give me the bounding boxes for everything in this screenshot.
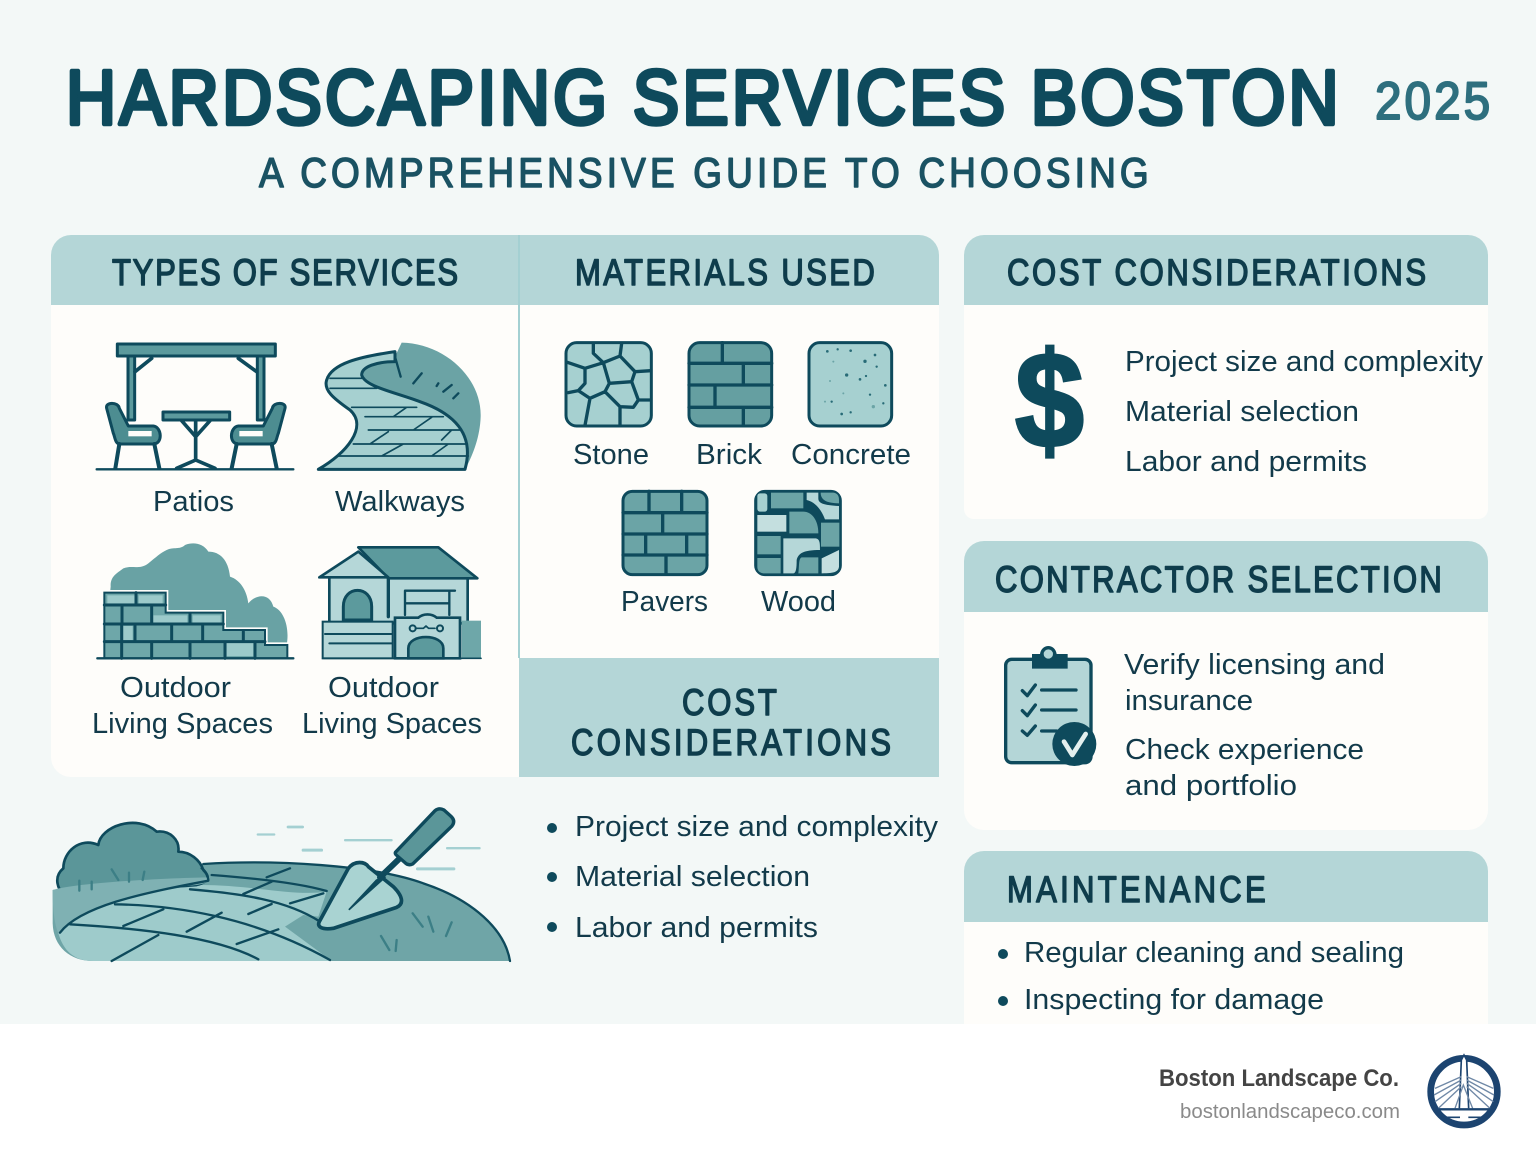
label: walkways: Walkways	[335, 486, 465, 518]
list: maintenance tasks: Inspecting for damage	[1024, 984, 1324, 1016]
label: brick: Brick	[696, 439, 763, 471]
text: experience: Check experience	[1125, 734, 1364, 766]
list: cost factors middle: Material selection	[575, 861, 810, 893]
text: licensing	[1124, 649, 1385, 717]
panel: types of services	[51, 235, 519, 777]
heading: cost considerations: COST CONSIDERATIONS	[1007, 253, 1426, 294]
heading: types of services: TYPES OF SERVICES	[112, 253, 458, 294]
label: outdoor living spaces left	[92, 672, 273, 740]
label: outdoor living spaces right	[302, 672, 482, 740]
panel: materials used	[518, 235, 939, 658]
list: cost factors: Labor and permits	[1125, 446, 1367, 478]
subtitle: A COMPREHENSIVE GUIDE TO CHOOSING	[259, 150, 1149, 197]
list: cost factors: Material selection	[1125, 396, 1359, 428]
panel: cost considerations banner: COST	[682, 683, 777, 724]
label: outdoor living spaces right: Living Spaces	[302, 708, 482, 740]
panel: maintenance	[964, 851, 1488, 1024]
icon: walkway	[318, 343, 481, 469]
icon: pavers	[623, 491, 707, 575]
icon: stone	[566, 343, 651, 426]
heading: maintenance: MAINTENANCE	[1007, 870, 1266, 911]
panel: contractor selection	[964, 541, 1488, 830]
list: cost factors middle: Project size and complexity	[575, 811, 939, 843]
text: licensing: Verify licensing and	[1124, 649, 1385, 681]
icon: patio	[97, 344, 293, 469]
list: maintenance tasks: Regular cleaning and sealing	[1024, 937, 1404, 969]
panel: cost considerations banner	[519, 658, 939, 777]
text: experience: and portfolio	[1125, 770, 1297, 802]
website: bostonlandscapeco.com	[1180, 1101, 1400, 1123]
text: licensing: insurance	[1125, 685, 1253, 717]
label: outdoor living spaces left: Living Spaces	[92, 708, 273, 740]
icon: concrete	[809, 343, 892, 426]
footer	[0, 1024, 1536, 1154]
label: outdoor living spaces left: Outdoor	[120, 672, 231, 704]
title: HARDSCAPING SERVICES BOSTON	[66, 55, 1339, 141]
title: 2025	[1375, 71, 1490, 131]
icon: dollar sign: $	[1015, 324, 1084, 476]
heading: materials used: MATERIALS USED	[575, 253, 875, 294]
icon: brick	[689, 343, 772, 426]
icon: retaining wall	[97, 543, 293, 658]
panel: cost considerations banner: CONSIDERATIONS	[571, 723, 891, 764]
list: cost factors middle	[547, 811, 939, 944]
label: stone: Stone	[573, 439, 649, 471]
panel: cost considerations	[964, 235, 1488, 519]
label: outdoor living spaces right: Outdoor	[328, 672, 439, 704]
icon: clipboard	[1006, 646, 1096, 766]
label: patios: Patios	[153, 486, 234, 518]
label: concrete: Concrete	[791, 439, 911, 471]
illustration: paved path with trowel	[53, 809, 510, 961]
list: maintenance tasks	[998, 937, 1404, 1016]
label: wood: Wood	[761, 586, 836, 618]
list: cost factors	[1125, 346, 1484, 478]
icon: bridge logo	[1431, 1055, 1497, 1125]
list: cost factors: Project size and complexity	[1125, 346, 1484, 378]
text: experience	[1125, 734, 1364, 802]
heading: contractor selection: CONTRACTOR SELECTION	[995, 560, 1442, 601]
label: pavers: Pavers	[621, 586, 708, 618]
icon: outdoor kitchen house	[319, 547, 481, 658]
list: cost factors middle: Labor and permits	[575, 912, 818, 944]
company name: Boston Landscape Co.	[1159, 1065, 1399, 1092]
icon: wood	[756, 491, 840, 575]
